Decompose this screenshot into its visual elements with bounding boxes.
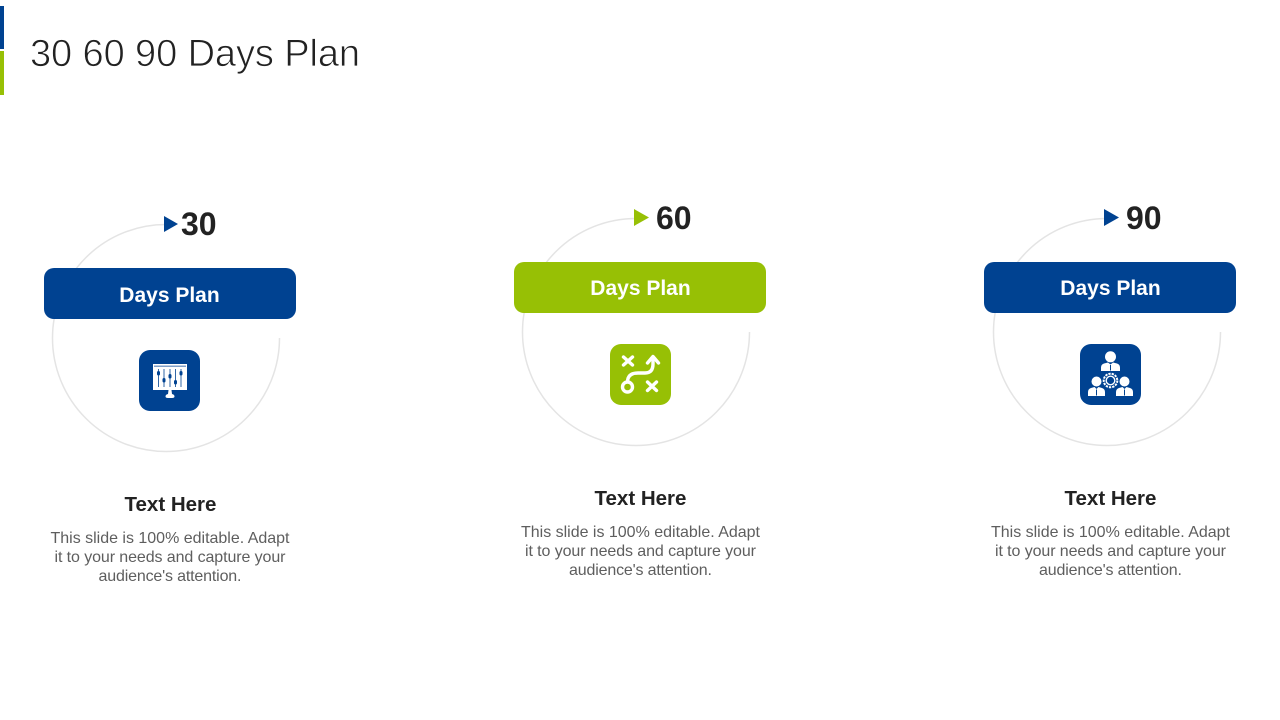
- title: 30 60 90 Days Plan: [30, 33, 360, 75]
- number 90: 90: [1126, 200, 1162, 236]
- progress arc: [993, 218, 1220, 446]
- icon: team around gear: [1080, 344, 1141, 405]
- panel: 90 days: [984, 200, 1236, 579]
- description: [50, 530, 290, 585]
- heading: Text Here: [1065, 487, 1156, 510]
- panel: 60 days: [514, 200, 766, 579]
- icon: monitor with sliders: [139, 350, 200, 411]
- days plan button: Days Plan: [590, 277, 691, 300]
- arrow marker: [634, 209, 649, 226]
- arrow marker: [164, 216, 178, 232]
- progress arc: [522, 218, 750, 446]
- days plan button: [44, 268, 296, 319]
- description: audience's attention.: [569, 562, 712, 579]
- days plan button: [984, 262, 1236, 313]
- accent bars: [0, 6, 4, 95]
- description: it to your needs and capture your: [54, 549, 286, 566]
- progress arc: [52, 224, 280, 452]
- description: audience's attention.: [98, 568, 242, 585]
- days plan button: Days Plan: [119, 284, 220, 307]
- number 30: 30: [181, 206, 217, 242]
- description: [991, 524, 1231, 579]
- days plan button: Days Plan: [1060, 277, 1161, 300]
- description: it to your needs and capture your: [525, 543, 757, 560]
- description: it to your needs and capture your: [995, 543, 1227, 560]
- arrow marker: [1104, 209, 1119, 226]
- days plan button: [514, 262, 766, 313]
- number 60: 60: [656, 200, 692, 236]
- description: audience's attention.: [1039, 562, 1182, 579]
- description: This slide is 100% editable. Adapt: [50, 530, 290, 547]
- heading: Text Here: [595, 487, 686, 510]
- description: This slide is 100% editable. Adapt: [521, 524, 761, 541]
- description: [521, 524, 761, 579]
- panel: 30 days: [44, 206, 296, 585]
- heading: Text Here: [125, 493, 216, 516]
- icon: strategy path: [610, 344, 671, 405]
- description: This slide is 100% editable. Adapt: [991, 524, 1231, 541]
